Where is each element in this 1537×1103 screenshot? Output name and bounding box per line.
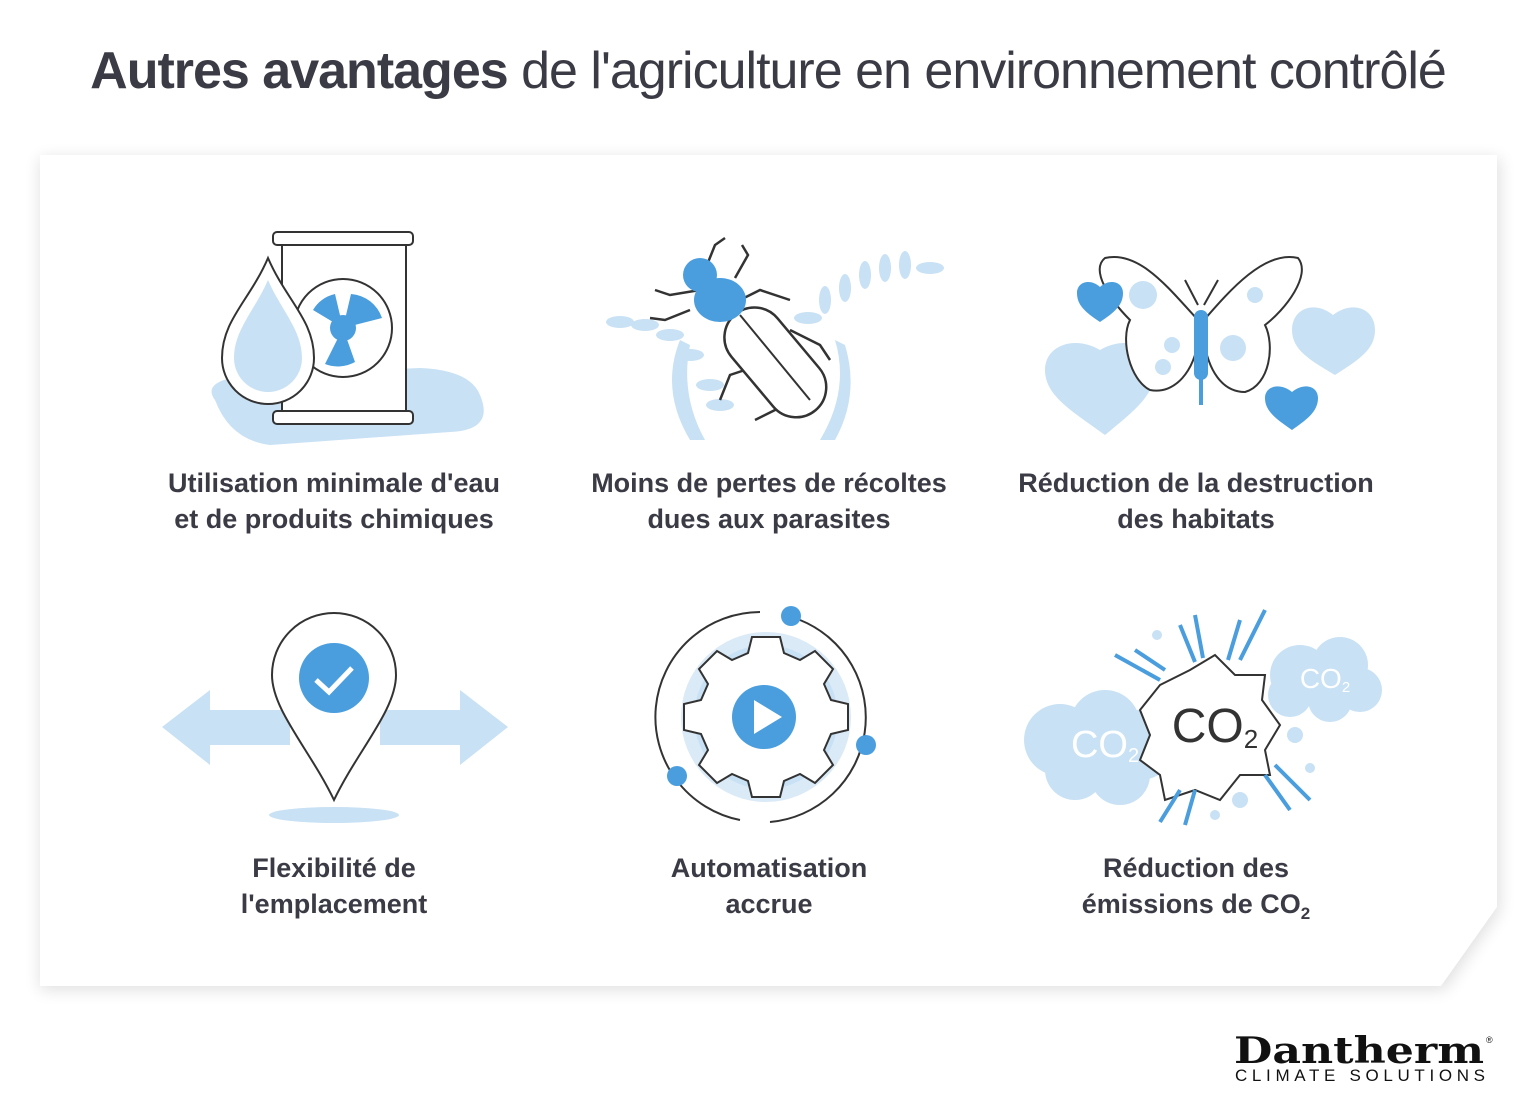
panel	[40, 155, 1500, 990]
label: habitats: Réduction de la destruction	[1018, 468, 1374, 498]
label: pests: Moins de pertes de récoltes	[591, 468, 947, 498]
icon: automation gear	[655, 606, 876, 822]
logo: Dantherm	[1234, 1030, 1484, 1072]
icon: CO2 clouds: 2	[1342, 679, 1350, 696]
icon: CO2 clouds: CO	[1071, 724, 1128, 766]
label: water: Utilisation minimale d'eau	[168, 468, 500, 498]
label: CO2: Réduction des	[1103, 853, 1289, 883]
label: automation: Automatisation	[671, 853, 867, 883]
icon: CO2 clouds: 2	[1244, 724, 1258, 754]
logo	[1234, 1030, 1493, 1085]
panel: des habitats	[1117, 504, 1275, 534]
icon: CO2 clouds: CO	[1300, 663, 1342, 694]
label: location: Flexibilité de	[252, 853, 416, 883]
icon: CO2 clouds: CO	[1172, 700, 1244, 753]
panel: émissions de CO	[1082, 889, 1301, 919]
panel: l'emplacement	[241, 889, 427, 919]
panel: dues aux parasites	[647, 504, 891, 534]
icon: beetle	[606, 238, 944, 440]
panel: accrue	[725, 889, 813, 919]
icon: CO2 clouds: 2	[1128, 745, 1139, 767]
title: Autres avantages de l'agriculture en environnement contrôlé	[90, 42, 1446, 100]
icon: CO2 clouds	[1024, 610, 1382, 825]
icon: location pin with arrows	[162, 613, 508, 823]
logo: ®	[1486, 1035, 1493, 1045]
panel: et de produits chimiques	[174, 504, 494, 534]
panel: 2	[1301, 904, 1310, 923]
logo: CLIMATE SOLUTIONS	[1235, 1066, 1485, 1085]
icon: water and chemicals	[212, 232, 484, 445]
icon: butterfly hearts	[1045, 257, 1375, 435]
